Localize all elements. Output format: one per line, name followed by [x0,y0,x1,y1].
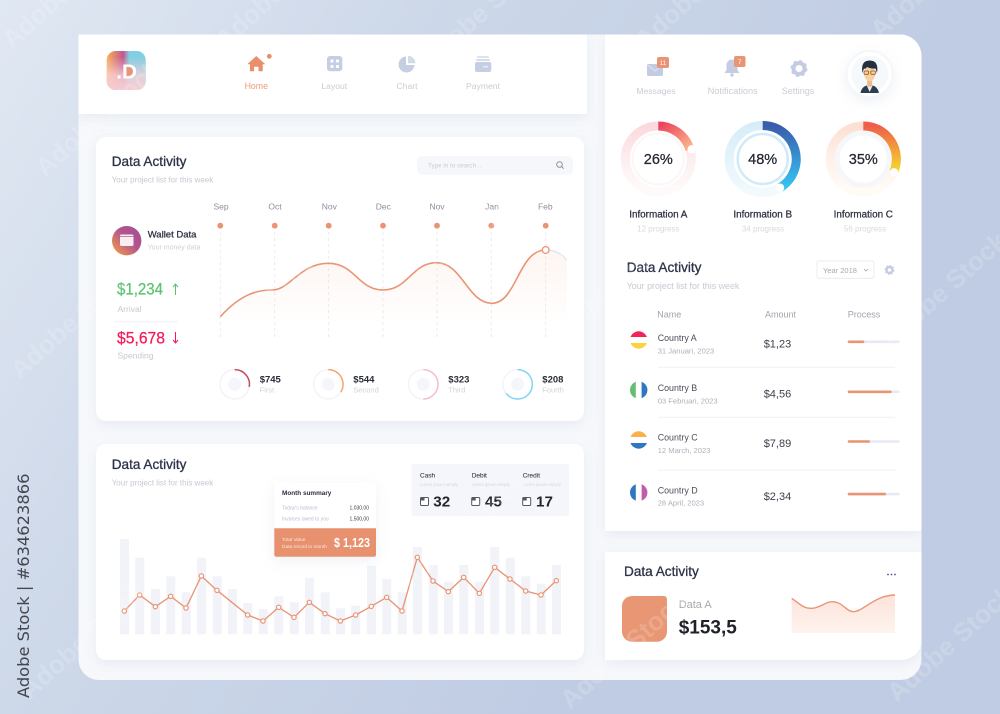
panel: main dashboard [78,34,922,681]
panel: payment stats: Debit [472,472,487,480]
month labels: Jan [485,202,499,212]
donut: information B [729,126,796,234]
icon: table settings [885,266,894,274]
month labels: Feb [538,202,553,212]
icon: notifications: Notifications [708,86,758,96]
watermark: adobe stock: Adobe Stock [14,575,153,704]
watermark: adobe stock: Adobe Stock [714,405,853,534]
metric: data A [679,600,736,636]
table row: country D: $2,34 [764,491,791,503]
table row: country B [630,381,900,405]
table row: country C: 12 March, 2023 [658,446,710,455]
panel: payment stats [412,464,569,516]
wallet summary: Spending [118,350,154,360]
table row: country D: 28 April, 2023 [658,499,704,508]
nav item: layout [321,56,348,91]
table row: country A [630,331,900,355]
panel: payment stats: Credit [523,472,540,480]
icon: settings: Settings [782,86,815,96]
table row: country A: $1,23 [764,338,791,350]
metric: data A: $153,5 [679,618,737,638]
table row: country C: Country C [658,433,698,443]
donut: information A: 12 progress [637,224,679,234]
callout: month summary: Month summary [282,490,332,497]
heading: Data Activity [112,154,187,169]
panel: payment stats: Lorem ipsum simply [523,482,562,487]
icon: avatar [847,51,893,97]
search box: Type in to search .. [428,162,481,170]
table row: country B: 03 Februari, 2023 [658,396,718,405]
panel: payment stats: 32 [433,494,450,510]
table row: country B: $4,56 [764,388,791,400]
heading: Your project list for this week [112,478,214,488]
watermark: adobe stock: Adobe Stock [709,175,848,304]
stat ring: first: First [260,386,275,394]
wallet summary [112,226,200,360]
stat ring: first: $745 [260,375,282,386]
watermark: adobe stock: Adobe Stock [174,435,313,564]
donut: information B: 34 progress [742,224,784,234]
table row: country D [630,483,900,508]
stat ring: second: Second [353,386,379,394]
panel: payment stats: Lorem ipsum simply [420,482,459,487]
nav item: chart [396,56,418,91]
icon: more dots [887,574,896,575]
panel: top navigation [78,34,587,114]
donut: information A: 26% [644,152,673,168]
panel: payment stats: 45 [485,494,502,510]
callout: month summary: Data record in month [282,544,327,550]
callout: month summary: 1,500,00 [350,516,369,522]
heading: Your project list for this week [112,176,214,184]
callout: month summary [274,483,376,557]
sparkline [792,595,895,633]
stat ring: third: $323 [448,375,469,386]
heading: country table: Your project list for this week [627,281,740,291]
watermark: adobe stock: Adobe Stock [4,255,143,384]
stat ring: second [314,370,379,399]
watermark: adobe stock: Adobe Stock [204,225,343,354]
panel: wallet line chart card [96,137,584,421]
donut: information B: Information B [733,210,792,220]
donut: information C: 56 progress [844,224,886,234]
stat ring: fourth: Fourth [542,386,564,394]
donut: information C: Information C [834,210,893,220]
month labels: Oct [268,202,282,212]
stat ring: first [220,370,282,399]
wallet summary: Wallet Data [148,230,197,241]
heading [112,154,214,184]
search box [417,156,573,175]
bar chart [120,539,561,634]
panel: data A summary [605,552,922,660]
callout: month summary: Total Value [282,537,306,543]
table row: country D: Country D [658,485,698,495]
icon: notifications [708,56,758,96]
month labels: Nov [429,202,445,212]
watermark: adobe stock: Adobe Stock [539,225,678,354]
donut: information B: 48% [748,152,777,168]
icon: messages [636,57,676,96]
metric: data A: Data A [679,599,712,611]
dropdown: year [817,261,874,278]
watermark: adobe stock: Adobe Stock [554,585,693,714]
line series with markers [122,555,558,623]
panel: payment stats: Lorem ipsum simply [472,482,511,487]
stat ring: second: $544 [353,375,375,386]
icon: logo: .D [116,60,137,83]
panel: right column [605,34,922,531]
nav item: home: Home [245,81,268,91]
wallet summary: Your money data [148,245,200,252]
nav item: chart: Chart [396,81,418,91]
callout: month summary: Today's balance [282,506,318,512]
table row: country C: $7,89 [764,438,791,450]
heading: country table: Data Activity [627,260,702,275]
table row: country C [630,431,900,455]
nav item: payment: Payment [466,81,501,91]
stat ring: fourth [503,370,564,399]
heading [112,457,214,488]
table header [658,311,880,318]
watermark: adobe stock: Adobe Stock [394,465,533,594]
icon: notifications: 7 [738,59,742,66]
icon: settings [782,61,815,96]
wallet summary: $1,234 [117,281,163,299]
wallet summary: Arrival [118,304,142,314]
icon: messages: 11 [660,61,667,67]
table header: Process [848,310,881,320]
table row: country A: 31 Januari, 2023 [658,346,714,355]
nav item: home [245,54,272,91]
heading: Data Activity [624,564,699,579]
icon: orange tile [622,596,667,642]
callout: month summary: 1,030,00 [350,506,369,512]
callout: month summary: $ 1,123 [334,536,370,550]
month labels: Nov [322,202,338,212]
stat ring: fourth: $208 [542,375,563,386]
panel: payment stats: Cash [420,472,436,480]
heading: Data Activity [112,457,187,472]
donut: information A [625,126,696,234]
icon: logo [107,51,146,90]
month labels: Sep [213,202,229,212]
line chart: monthly activity [213,202,567,340]
watermark: adobe stock: Adobe Stock [374,195,513,324]
icon: messages: Messages [636,86,676,96]
wallet summary: $5,678 [117,330,165,348]
table row: country B: Country B [658,383,697,393]
table header: Name [657,310,681,320]
panel: payment stats: 17 [536,494,553,510]
donut: information C: 35% [849,152,878,168]
month labels: Dec [376,202,392,212]
nav item: layout: Layout [321,81,348,91]
panel: bar and line chart card [96,444,584,660]
nav item: payment [466,56,501,91]
donut: information A: Information A [629,210,688,220]
callout: month summary: Invoices owed to you [282,516,329,522]
dropdown: year: Year 2018 [823,266,857,275]
stat ring: third: Third [448,386,465,394]
side caption: stock id: Adobe Stock | #634623866 [14,474,33,698]
month labels [214,204,552,211]
heading: country table [627,260,740,291]
stat ring: third [409,370,469,399]
table row: country A: Country A [658,333,697,343]
watermark: adobe stock: Adobe Stock [29,53,168,182]
donut: information C [830,126,898,234]
table header: Amount [765,310,797,320]
